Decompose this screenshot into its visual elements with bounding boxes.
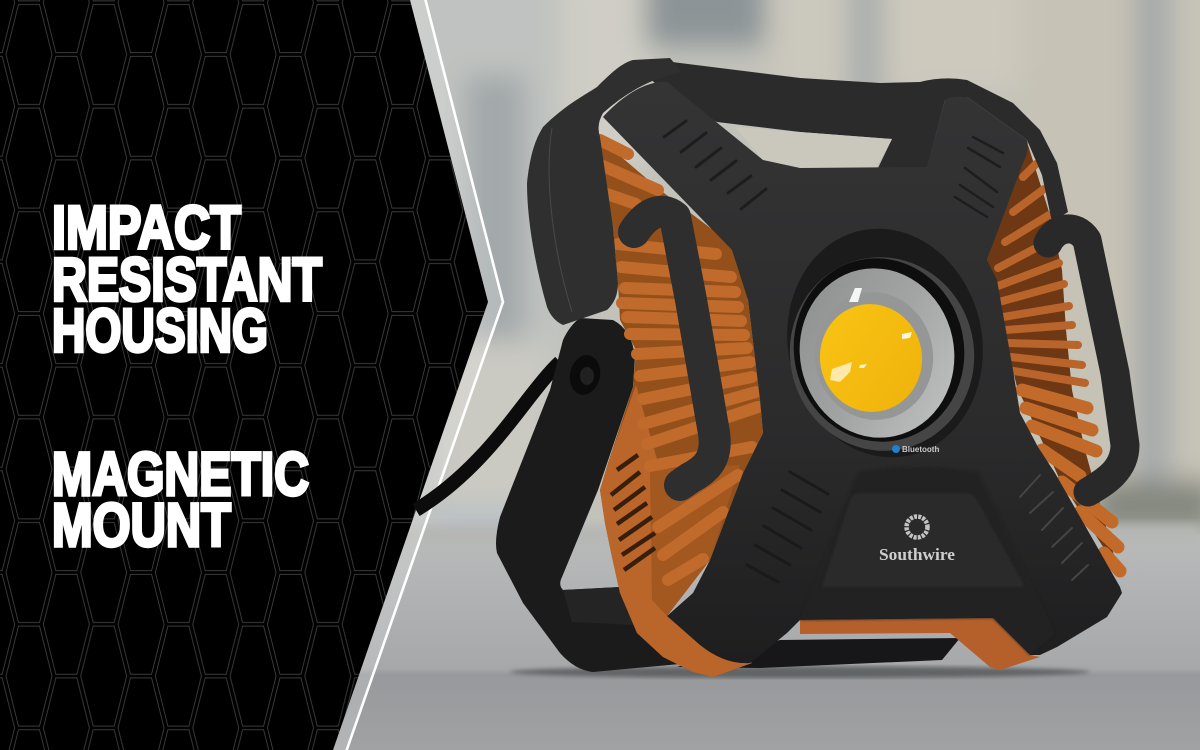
left lattice slots: [611, 455, 655, 570]
bumper seam: [549, 128, 572, 312]
floor shadow: [510, 666, 1090, 678]
rear stand: [496, 318, 680, 672]
top carry handle and right bumper: [640, 62, 1068, 222]
yellow LED emitter: [811, 296, 931, 420]
black chevron panel with hexagon pattern: [0, 0, 488, 750]
right fins: [998, 164, 1085, 383]
lower-left grip ridges: [747, 472, 828, 582]
Southwire logo: [879, 516, 955, 564]
heading: impact resistant housing: [52, 193, 322, 364]
stand lower bar highlight: [563, 587, 636, 625]
heading: magnetic mount: MOUNT: [52, 491, 231, 559]
upper-left arm grip ridges: [664, 121, 766, 209]
lens outer glass rim: [772, 240, 992, 468]
right heat sink base: [987, 145, 1118, 570]
heading: impact resistant housing: RESISTANT: [52, 245, 322, 313]
lower logo panel: [822, 493, 1025, 587]
silver reflector ring: [784, 254, 970, 452]
heading: magnetic mount: [52, 440, 309, 559]
white chevron line: [346, 0, 503, 750]
main X-shaped housing: [603, 82, 1122, 663]
left lattice zone: [600, 385, 752, 677]
left fins: [600, 140, 758, 580]
product: work light: [496, 58, 1125, 677]
stand pivot knob: [566, 352, 604, 398]
blurred warehouse background photo: [300, 0, 1200, 750]
Southwire logo: Southwire: [879, 545, 955, 564]
heading: impact resistant housing: HOUSING: [52, 296, 268, 364]
right hook handle: [1048, 229, 1125, 492]
power cable: [416, 362, 560, 510]
left hook handle: [634, 212, 715, 485]
rear base bar: [677, 638, 960, 668]
bluetooth mark: Bluetooth: [902, 445, 939, 454]
lower-right grip ridges: [1020, 475, 1088, 580]
left orange heat sink base: [598, 137, 763, 677]
heading: impact resistant housing: IMPACT: [52, 193, 241, 261]
upper-right arm grip ridges: [955, 137, 1003, 217]
translucent band between black panel and white chevron line: [333, 0, 503, 750]
lens reflections: [830, 288, 912, 382]
left side bumper: [527, 58, 682, 325]
lens recess: [766, 210, 1004, 476]
lower fin shaded zone: [650, 465, 740, 616]
orange underside foot: [800, 618, 1040, 670]
lower logo surround: [800, 467, 1055, 655]
heading: magnetic mount: MAGNETIC: [52, 440, 309, 508]
gap under handle: [735, 127, 892, 168]
